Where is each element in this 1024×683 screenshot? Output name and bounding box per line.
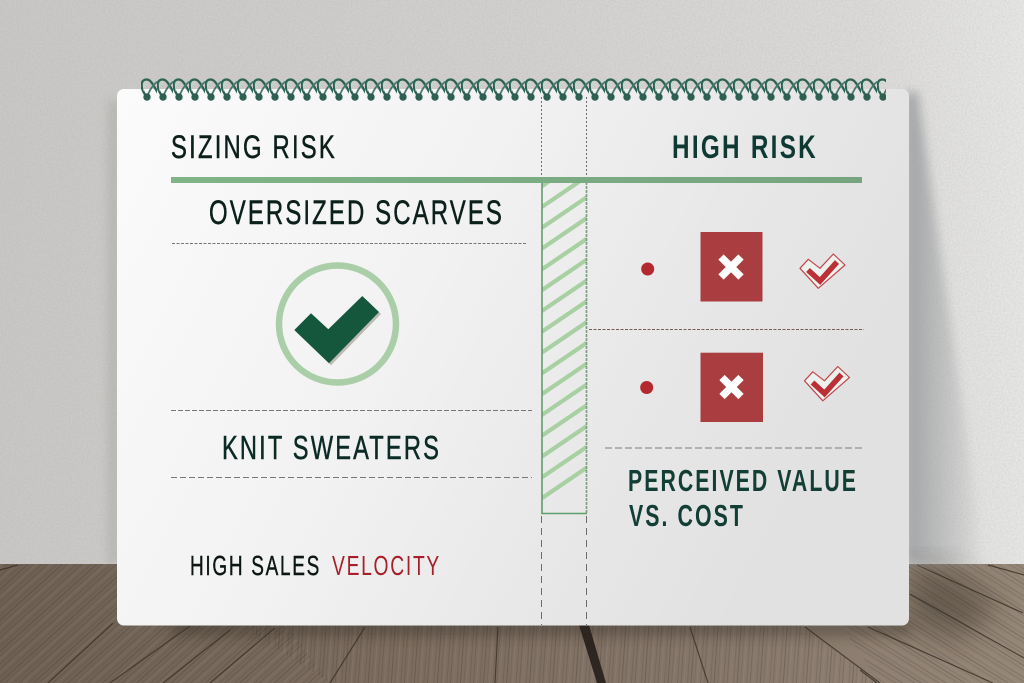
icon: red x square: [700, 353, 763, 422]
hatched centre column: [542, 156, 587, 514]
label: high sales velocity: VELOCITY: [332, 550, 441, 581]
spiral binding: [141, 77, 886, 103]
heading: high risk: HIGH RISK: [672, 129, 818, 165]
icon: red x square: [700, 232, 762, 302]
notebook page: [117, 89, 909, 626]
right column dividers: [589, 330, 864, 448]
label: knit sweaters: KNIT SWEATERS: [222, 429, 441, 466]
label: high sales velocity: HIGH SALES: [190, 550, 321, 581]
icon: red dot: [641, 262, 654, 276]
label: perceived value vs. cost: [628, 463, 858, 533]
wooden floor: [0, 564, 1024, 683]
label: perceived value vs. cost: VS. COST: [629, 498, 745, 533]
row 2: risk indicators: [640, 353, 850, 422]
left column dividers: [171, 244, 532, 478]
icon: outlined check: [804, 366, 850, 401]
row 1: risk indicators: [641, 232, 845, 302]
icon: green check in circle: [279, 266, 396, 382]
heading: sizing risk: SIZING RISK: [171, 129, 337, 165]
vertical dashed fold lines: [542, 97, 586, 625]
green header rule: [171, 177, 862, 183]
icon: outlined check: [800, 254, 845, 288]
label: oversized scarves: OVERSIZED SCARVES: [209, 194, 504, 232]
label: perceived value vs. cost: PERCEIVED VALUE: [628, 463, 858, 498]
icon: red dot: [640, 381, 653, 394]
notebook shadow: [108, 92, 1000, 640]
